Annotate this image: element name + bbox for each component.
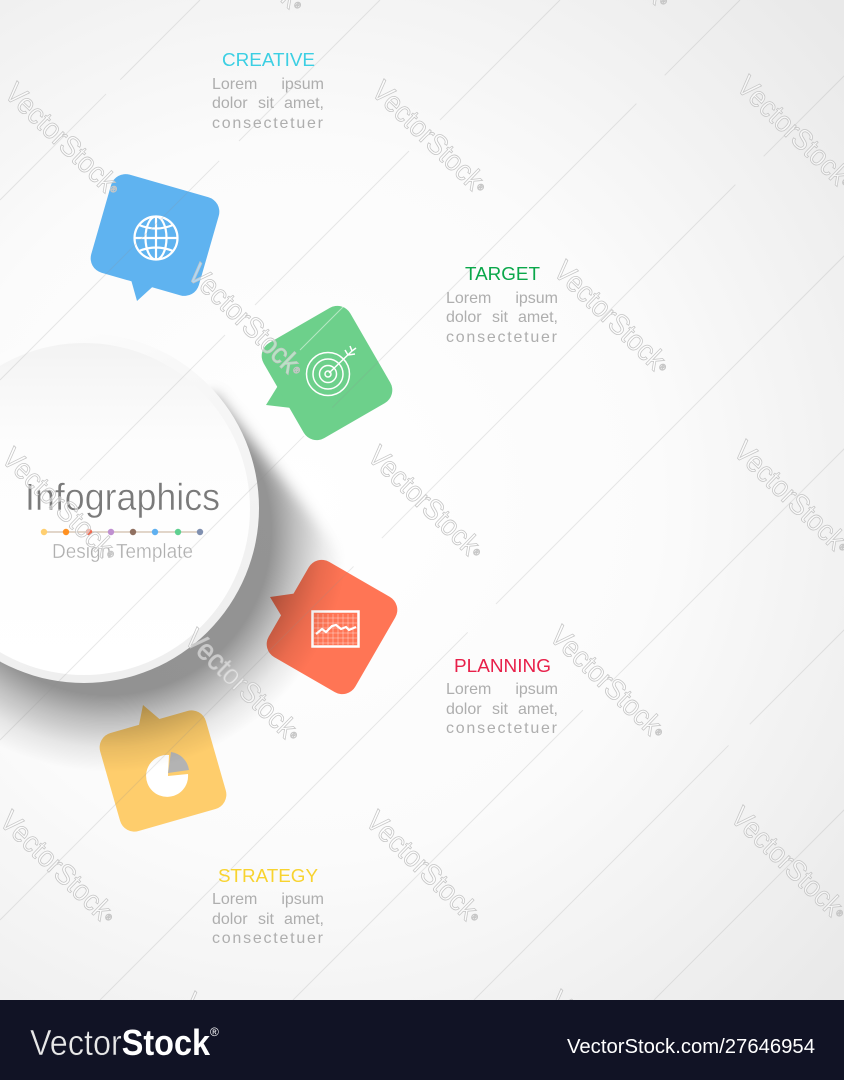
speech bubble: planning	[261, 554, 403, 700]
text block: strategy: amet,	[284, 911, 324, 928]
circle shadow	[0, 388, 335, 762]
registered mark: ®	[210, 1025, 219, 1039]
text block: creative: dolor	[212, 95, 248, 112]
watermarks: ®	[657, 362, 668, 373]
text block: strategy	[212, 866, 324, 947]
speech bubble: creative	[87, 171, 223, 301]
text block: target: sit	[492, 309, 509, 326]
icon: pie chart	[146, 752, 189, 797]
text block: creative: consectetuer	[212, 115, 324, 132]
watermarks: VectorStock	[0, 77, 132, 208]
text block: planning: amet,	[518, 701, 558, 718]
footer url: VectorStock.com/27646954	[567, 1036, 815, 1058]
text block: creative: ipsum	[281, 76, 324, 93]
center circle	[0, 333, 259, 683]
text block: planning: consectetuer	[446, 720, 558, 737]
watermarks: ®	[288, 730, 299, 741]
watermarks: ®	[103, 912, 114, 923]
watermarks: VectorStock	[365, 75, 499, 206]
text block: planning: PLANNING	[454, 656, 551, 676]
text block: planning	[446, 656, 558, 737]
watermarks: ®	[471, 547, 482, 558]
watermarks: VectorStock	[543, 620, 677, 751]
watermarks: ®	[108, 184, 119, 195]
subtitle: Design Template	[52, 540, 193, 563]
text block: target: amet,	[518, 309, 558, 326]
icon: globe	[134, 216, 178, 260]
watermarks: VectorStock	[361, 440, 495, 571]
speech bubble: target	[256, 300, 398, 446]
watermarks: VectorStock	[547, 255, 681, 386]
footer bar	[0, 1000, 844, 1080]
text block: creative: amet,	[284, 95, 324, 112]
watermarks: VectorStock	[178, 623, 312, 754]
footer logo: VectorStock	[30, 1022, 211, 1063]
watermarks: ®	[469, 912, 480, 923]
watermarks: ®	[475, 182, 486, 193]
watermarks: ®	[105, 549, 116, 560]
icon: target	[306, 346, 356, 396]
text block: creative	[212, 50, 324, 132]
title text: Infographics	[25, 477, 220, 519]
timeline dots	[41, 529, 203, 535]
text block: creative: sit	[258, 95, 275, 112]
speech bubble: strategy	[96, 705, 230, 835]
text block: planning: Lorem	[446, 681, 491, 698]
text block: target: consectetuer	[446, 329, 558, 346]
text block: target: ipsum	[515, 290, 558, 307]
text block: planning: dolor	[446, 701, 482, 718]
text block: strategy: consectetuer	[212, 930, 324, 947]
watermarks: VectorStock	[181, 258, 315, 389]
text block: strategy: Lorem	[212, 891, 257, 908]
watermarks: VectorStock	[359, 805, 493, 936]
text block: strategy: ipsum	[281, 891, 324, 908]
text block: planning: ipsum	[515, 681, 558, 698]
text block: creative: CREATIVE	[222, 50, 315, 70]
watermarks: ®	[291, 365, 302, 376]
text block: strategy: sit	[258, 911, 275, 928]
text block: target: dolor	[446, 309, 482, 326]
text block: target	[446, 264, 558, 346]
text block: planning: sit	[492, 701, 509, 718]
text block: strategy: dolor	[212, 911, 248, 928]
text block: target: TARGET	[465, 264, 540, 284]
text block: target: Lorem	[446, 290, 491, 307]
icon: line chart	[312, 612, 358, 646]
watermarks: ®	[653, 727, 664, 738]
text block: creative: Lorem	[212, 76, 257, 93]
text block: strategy: STRATEGY	[218, 866, 318, 886]
